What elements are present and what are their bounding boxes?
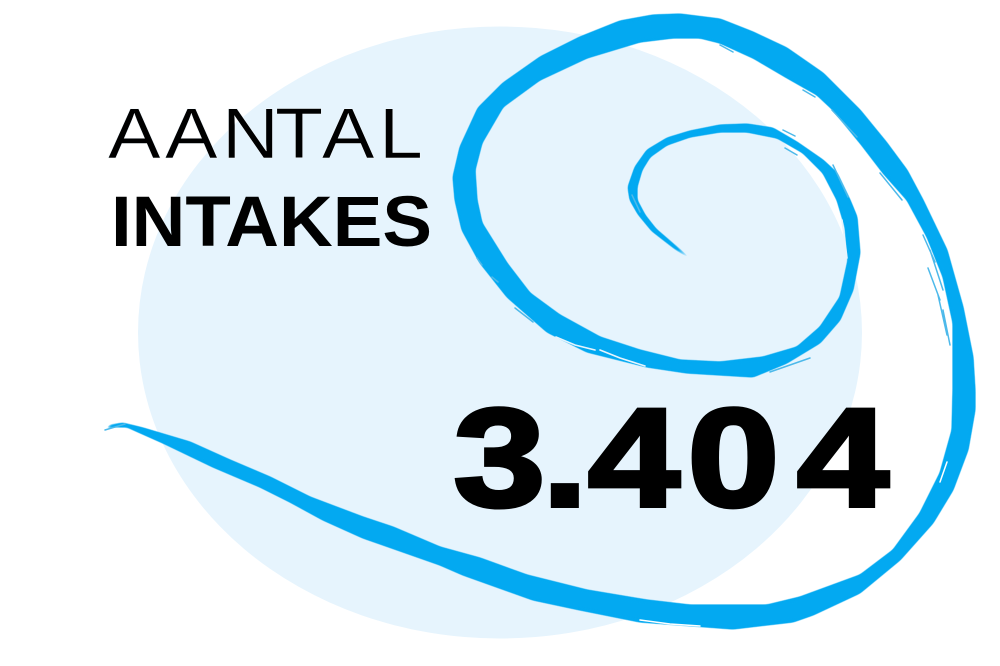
big number: 3.404 <box>453 380 889 536</box>
background ellipse <box>138 26 862 638</box>
heading line: AANTAL: AANTAL <box>108 94 423 173</box>
heading line: INTAKES: INTAKES <box>111 183 432 262</box>
